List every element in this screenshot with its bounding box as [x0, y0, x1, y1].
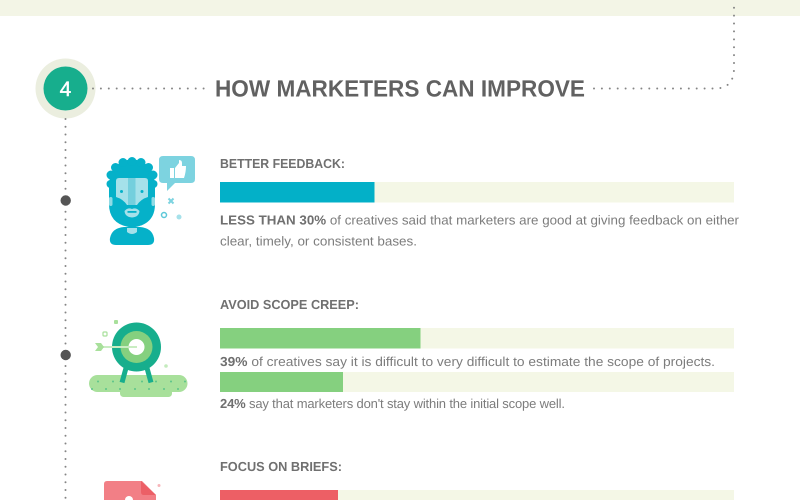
icon: document brief	[104, 481, 160, 500]
progress bar: focus on briefs	[220, 490, 734, 500]
progress bar: scope estimate	[220, 328, 734, 348]
step number badge	[36, 58, 96, 118]
icon: bearded man with thumbs up	[106, 156, 195, 245]
block heading: better feedback: BETTER FEEDBACK:	[220, 156, 345, 171]
icon: target with arrow on grass	[89, 320, 188, 397]
dotted timeline	[64, 119, 66, 500]
text: better feedback stat	[220, 212, 740, 248]
block heading: focus on briefs: FOCUS ON BRIEFS:	[220, 459, 342, 474]
top band	[0, 0, 800, 16]
text: better feedback stat: LESS THAN 30% of creatives said that marketers are good at giving feedback on either	[220, 212, 740, 228]
text: better feedback stat: clear, timely, or consistent bases.	[220, 234, 417, 248]
text: initial scope stat: 24% say that marketers don't stay within the initial scope well.	[220, 396, 565, 411]
step number badge: 4	[60, 78, 72, 101]
progress bar: better feedback	[220, 182, 734, 202]
title: HOW MARKETERS CAN IMPROVE	[215, 76, 585, 102]
block heading: avoid scope creep: AVOID SCOPE CREEP:	[220, 297, 359, 312]
timeline marker 2	[60, 350, 71, 360]
text: scope estimate stat: 39% of creatives say it is difficult to very difficult to estimate the scope of projects.	[220, 354, 715, 369]
dotted connector: left	[93, 88, 207, 90]
dotted connector: right curve	[594, 0, 734, 88]
timeline marker 1	[60, 195, 71, 206]
progress bar: initial scope	[220, 372, 734, 392]
